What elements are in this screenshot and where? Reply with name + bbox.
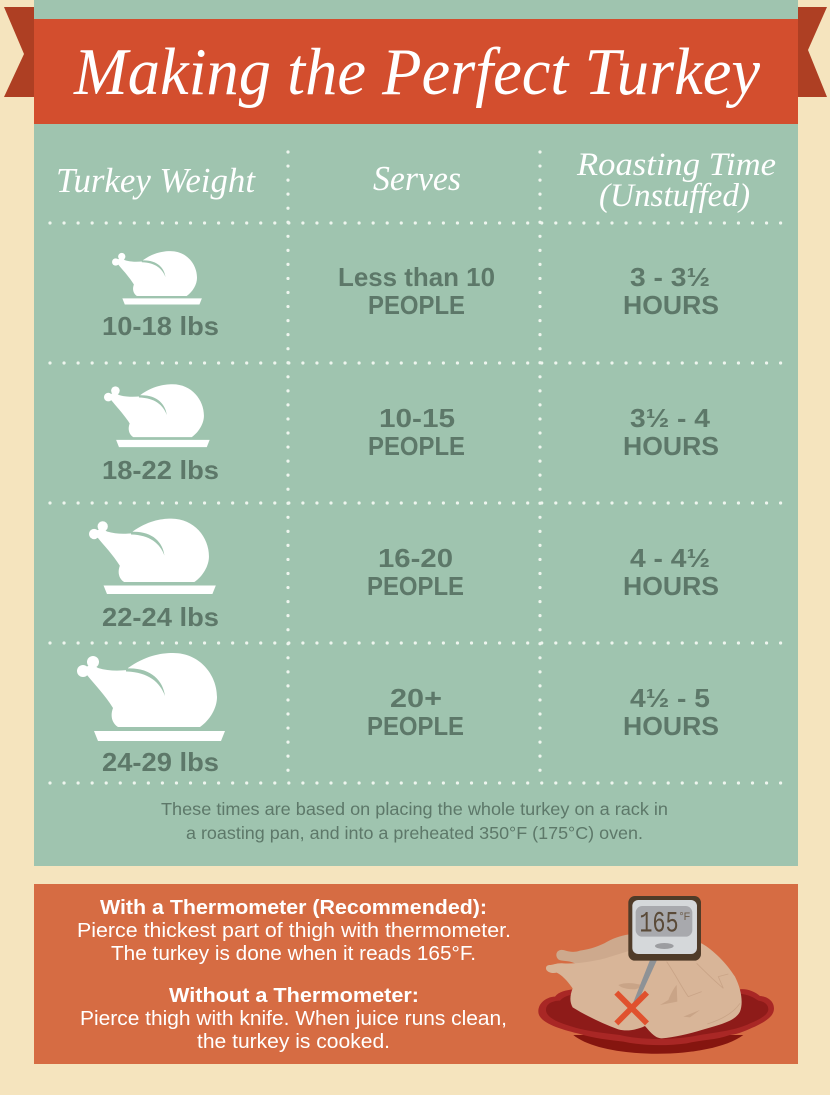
text: without a thermometer — [80, 985, 507, 1053]
row 4: 24-29 lbs: HOURS — [623, 711, 719, 741]
illustration: turkey with thermometer — [538, 896, 774, 1054]
turkey body — [546, 943, 742, 1038]
row 1: 10-18 lbs: HOURS — [623, 290, 719, 320]
thermometer unit: °F — [679, 911, 691, 923]
footnote: a roasting pan, and into a preheated 350°F (175°C) oven. — [186, 823, 643, 843]
back leg — [556, 934, 635, 967]
row 4: 24-29 lbs — [77, 653, 719, 777]
icon: large turkey — [89, 519, 216, 594]
icon: right ribbon tail — [798, 7, 827, 97]
row 3: 22-24 lbs — [89, 519, 719, 632]
row 1: 10-18 lbs: 3 - 3½ — [630, 262, 710, 292]
row 4: 24-29 lbs: 20+ — [390, 683, 442, 713]
text: with a thermometer: With a Thermometer (Recommended): — [100, 897, 487, 919]
row 4: 24-29 lbs: 4½ - 5 — [630, 683, 710, 713]
row 4: 24-29 lbs: 24-29 lbs — [102, 747, 219, 777]
thermometer probe — [631, 960, 657, 1007]
column heading: turkey weight: Turkey Weight — [56, 161, 256, 200]
row 1: 10-18 lbs: 10-18 lbs — [102, 311, 219, 341]
row 3: 22-24 lbs: 22-24 lbs — [102, 602, 219, 632]
icon: extra large turkey — [77, 653, 225, 741]
panel: doneness tips — [34, 884, 798, 1064]
column heading: roasting time: (Unstuffed) — [599, 178, 750, 214]
text: with a thermometer: The turkey is done when it reads 165°F. — [111, 943, 476, 965]
title: Making the Perfect Turkey — [73, 35, 760, 109]
row 2: 18-22 lbs: PEOPLE — [368, 431, 465, 461]
row 1: 10-18 lbs: PEOPLE — [368, 290, 465, 320]
thermometer head — [628, 896, 701, 961]
icon: small turkey — [112, 251, 202, 304]
row 2: 18-22 lbs: 10-15 — [379, 403, 455, 433]
text: with a thermometer — [77, 897, 511, 965]
row 4: 24-29 lbs: PEOPLE — [367, 711, 464, 741]
column heading: roasting time — [576, 147, 776, 214]
row 2: 18-22 lbs: HOURS — [623, 431, 719, 461]
row 1: 10-18 lbs: Less than 10 — [338, 262, 495, 292]
turkey shading — [618, 983, 700, 1017]
title banner — [34, 19, 798, 124]
row 3: 22-24 lbs: 16-20 — [378, 543, 453, 573]
column heading: serves: Serves — [373, 159, 461, 198]
footnote — [161, 799, 668, 843]
thermometer reading: 165 — [639, 907, 679, 940]
row 2: 18-22 lbs — [102, 384, 719, 485]
row 3: 22-24 lbs: HOURS — [623, 571, 719, 601]
text: without a thermometer: Pierce thigh with knife. When juice runs clean, — [80, 1008, 507, 1030]
text: without a thermometer: Without a Thermometer: — [169, 985, 419, 1007]
text: with a thermometer: Pierce thickest part of thigh with thermometer. — [77, 920, 511, 942]
icon: left ribbon tail — [4, 7, 34, 97]
row 3: 22-24 lbs: 4 - 4½ — [630, 543, 710, 573]
text: without a thermometer: the turkey is cooked. — [197, 1031, 390, 1053]
platter — [538, 989, 774, 1054]
row 2: 18-22 lbs: 18-22 lbs — [102, 455, 219, 485]
row 3: 22-24 lbs: PEOPLE — [367, 571, 464, 601]
red x mark — [616, 993, 647, 1023]
panel: roasting table — [34, 0, 798, 866]
icon: medium turkey — [104, 384, 210, 447]
column heading: roasting time: Roasting Time — [576, 147, 776, 183]
row 1: 10-18 lbs — [102, 251, 719, 341]
turkey detail lines — [667, 962, 740, 1024]
row 2: 18-22 lbs: 3½ - 4 — [630, 403, 711, 433]
footnote: These times are based on placing the whole turkey on a rack in — [161, 799, 668, 819]
